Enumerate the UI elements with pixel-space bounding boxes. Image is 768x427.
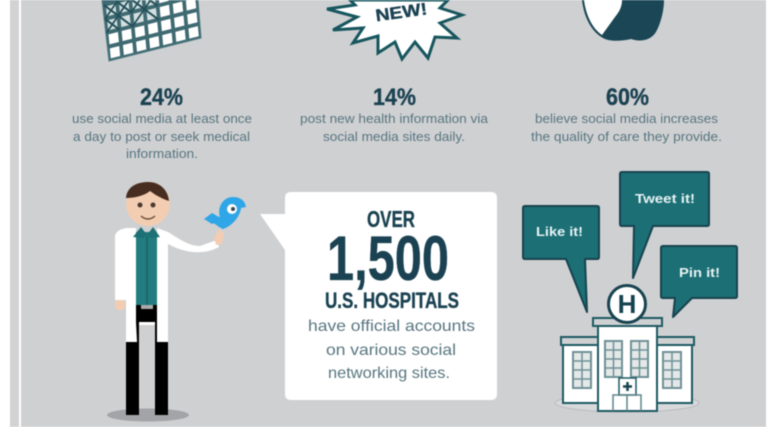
hospital H sign: H bbox=[618, 289, 636, 319]
icon: apple pie chart bbox=[582, 0, 664, 41]
doctor figure bbox=[107, 182, 224, 422]
stat: 24%: use social media at least once bbox=[72, 112, 252, 126]
icon: twitter bird bbox=[204, 197, 246, 229]
stat: 24%: a day to post or seek medical bbox=[73, 130, 250, 144]
speech bubble: tweet it bbox=[620, 172, 709, 278]
icon: new burst bbox=[327, 0, 462, 59]
stat: 60%: 60% bbox=[606, 84, 649, 111]
speech bubble: pin it bbox=[661, 246, 737, 317]
speech bubble: like it bbox=[523, 206, 599, 312]
hospital windows bbox=[573, 341, 681, 388]
callout: hospitals: 1,500 bbox=[327, 224, 449, 294]
callout: hospitals: networking sites. bbox=[328, 365, 450, 382]
doctor coat bbox=[115, 228, 219, 342]
hospital H sign bbox=[608, 286, 646, 322]
stat: 60% bbox=[531, 84, 722, 144]
doctor legs bbox=[126, 322, 168, 415]
doctor head bbox=[126, 182, 170, 226]
speech bubble: tweet it: Tweet it! bbox=[635, 191, 695, 206]
callout: hospitals: have official accounts bbox=[308, 318, 475, 335]
doctor shirt bbox=[133, 227, 160, 305]
icon: calendar bbox=[102, 0, 201, 61]
icon: hospital bbox=[555, 286, 699, 412]
callout: hospitals: U.S. HOSPITALS bbox=[325, 288, 459, 313]
callout: hospitals: OVER bbox=[367, 206, 415, 232]
stat: 14%: 14% bbox=[373, 84, 416, 111]
stat: 60%: the quality of care they provide. bbox=[531, 130, 722, 144]
stat: 24%: information. bbox=[126, 147, 198, 161]
stat: 60%: believe social media increases bbox=[535, 112, 718, 126]
speech bubble: like it: Like it! bbox=[536, 224, 583, 239]
callout: hospitals bbox=[260, 192, 497, 400]
hospital door bbox=[613, 378, 641, 411]
stat: 24% bbox=[72, 84, 252, 161]
stat: 24%: 24% bbox=[140, 84, 183, 111]
callout: hospitals: on various social bbox=[326, 342, 456, 359]
stat: 14%: post new health information via bbox=[300, 112, 488, 126]
hospital wings bbox=[561, 318, 694, 411]
new label: NEW! bbox=[374, 0, 428, 25]
stat: 14%: social media sites daily. bbox=[323, 130, 465, 144]
speech bubble: pin it: Pin it! bbox=[679, 265, 720, 280]
stat: 14% bbox=[300, 84, 488, 144]
